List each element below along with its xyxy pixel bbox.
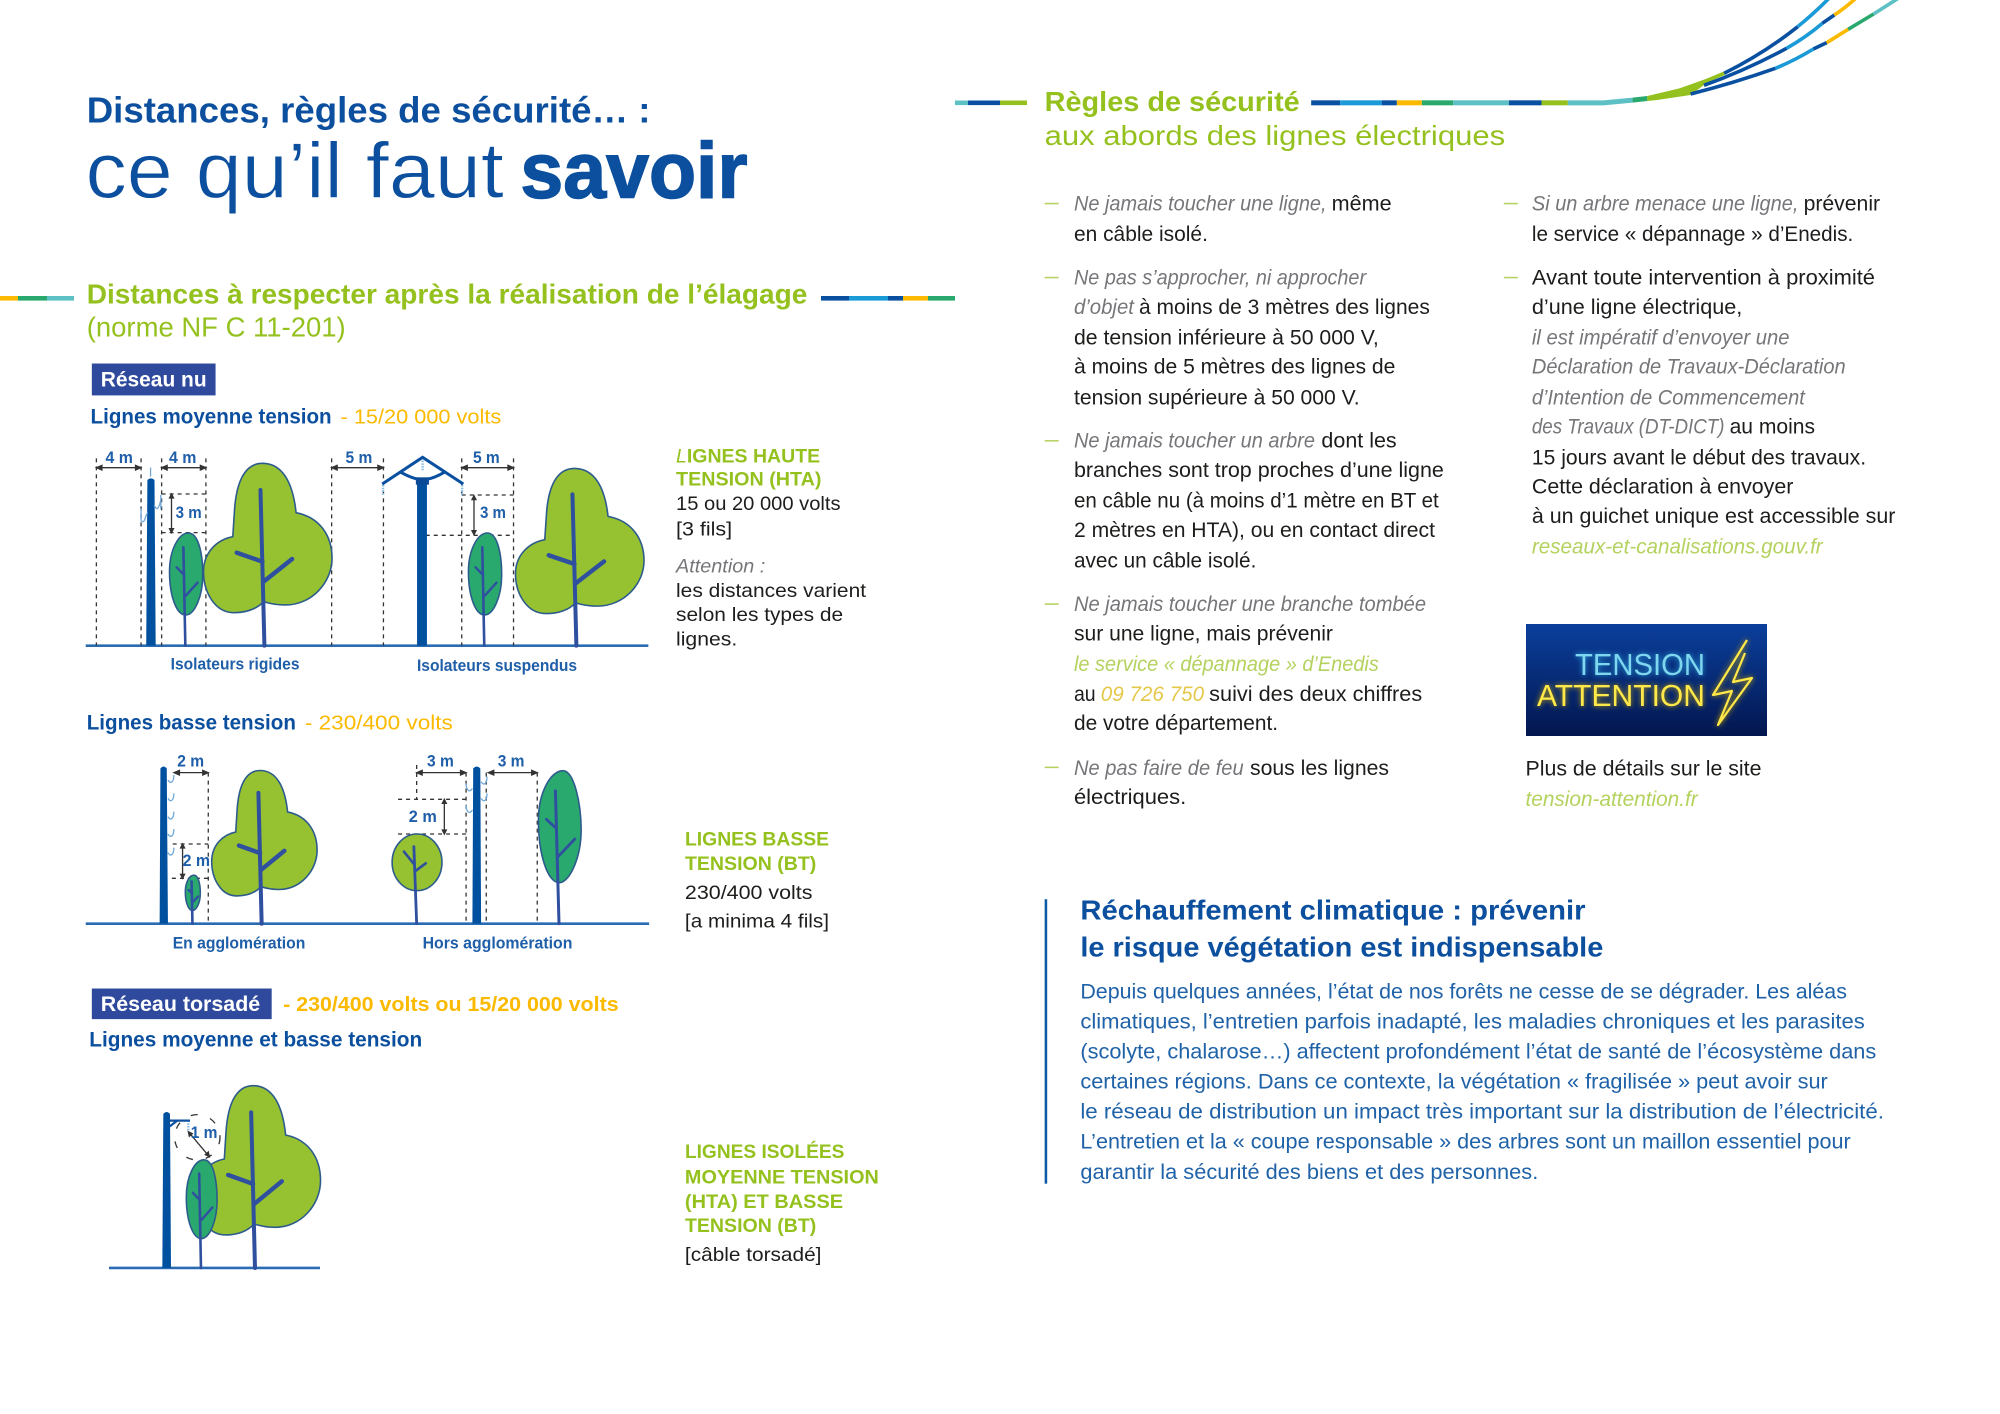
title: ce qu’il faut bbox=[85, 126, 504, 215]
diagram: réseau torsadé bbox=[109, 1086, 321, 1268]
callout body bbox=[1080, 979, 1884, 1184]
diagram dimension labels moyenne tension: 4 m bbox=[169, 448, 196, 467]
rule 4 bbox=[1045, 591, 1426, 735]
rule 3 bbox=[1045, 428, 1444, 573]
diagram dimension labels basse tension: 3 m bbox=[498, 752, 524, 771]
rule 7: à un guichet unique est accessible sur bbox=[1532, 503, 1895, 528]
title: Distances, règles de sécurité… : bbox=[87, 90, 651, 130]
text: lignes basse tension BT: [a minima 4 fils] bbox=[685, 911, 829, 932]
rule 1: en câble isolé. bbox=[1074, 221, 1208, 246]
diagram dimension labels moyenne tension: Isolateurs rigides bbox=[171, 655, 299, 674]
text: lignes basse tension BT bbox=[685, 829, 829, 932]
subheading: lignes moyenne tension: - 15/20 000 volts bbox=[341, 406, 501, 428]
text: lignes isolées bbox=[685, 1140, 879, 1266]
all text in 1568-wide layout units bbox=[85, 86, 1895, 1266]
text: lignes haute tension: lignes. bbox=[676, 629, 737, 650]
rule 3: branches sont trop proches d’une ligne bbox=[1074, 457, 1444, 482]
rule 2: à moins de 3 mètres des lignes bbox=[1139, 294, 1430, 319]
diagram dimension labels basse tension: 3 m bbox=[427, 752, 454, 771]
callout body: Depuis quelques années, l’état de nos forêts ne cesse de se dégrader. Les aléas bbox=[1080, 979, 1847, 1004]
icon: very small tree bbox=[185, 875, 200, 924]
heading: distances à respecter: Distances à respecter après la réalisation de l’élagage bbox=[87, 279, 807, 310]
subheading: lignes moyenne tension bbox=[91, 405, 501, 428]
rule 7: au moins bbox=[1730, 414, 1815, 439]
icon: dashed circle and arrow 1 m bbox=[175, 1115, 220, 1160]
callout body: le réseau de distribution un impact très important sur la distribution de l’électricité. bbox=[1080, 1099, 1884, 1124]
rule 7: d’Intention de Commencement bbox=[1532, 384, 1806, 409]
rule 3: Ne jamais toucher un arbre bbox=[1074, 428, 1315, 453]
heading: règles de sécurité bbox=[1045, 86, 1505, 151]
diagram dimension labels moyenne tension: Isolateurs suspendus bbox=[417, 656, 577, 675]
icon: arrows 4 m, 3 m, 5 m bbox=[96, 465, 514, 535]
icon: round tree bbox=[392, 834, 442, 924]
rule 2: Ne pas s’approcher, ni approcher bbox=[1074, 264, 1367, 289]
text: lignes haute tension: Attention : bbox=[675, 557, 765, 578]
text: lignes haute tension: LIGNES HAUTE bbox=[676, 445, 820, 467]
subheading: lignes moyenne tension: Lignes moyenne tension bbox=[91, 405, 332, 428]
rule 4: sur une ligne, mais prévenir bbox=[1074, 620, 1333, 645]
title bbox=[85, 90, 747, 215]
rule 3: dont les bbox=[1321, 428, 1397, 453]
image: tension attention neon logo: TENSION bbox=[1575, 647, 1705, 682]
image: tension attention neon logo bbox=[1526, 624, 1767, 736]
rule 7 bbox=[1504, 264, 1895, 559]
rule 3: en câble nu (à moins d’1 mètre en BT et bbox=[1074, 488, 1439, 513]
link: tension-attention: tension-attention.fr bbox=[1526, 786, 1698, 811]
rule 5 bbox=[1045, 755, 1389, 809]
rule 4: 09 726 750 bbox=[1101, 681, 1204, 706]
icon: arrows 2 m, 3 m bbox=[174, 770, 537, 878]
list column 1 bbox=[1045, 190, 1444, 809]
text: lignes isolées: (HTA) ET BASSE bbox=[685, 1191, 843, 1213]
icon: large tree bbox=[204, 463, 332, 646]
text: lignes haute tension: 15 ou 20 000 volts bbox=[676, 494, 841, 515]
rule 6: Si un arbre menace une ligne, bbox=[1532, 190, 1798, 215]
diagram dimension label 1 m: 1 m bbox=[191, 1123, 217, 1142]
icon: pole hors agglomération bbox=[466, 766, 487, 924]
diagram dimension labels basse tension: 2 m bbox=[183, 851, 210, 870]
rule 5: électriques. bbox=[1074, 784, 1186, 809]
link: tension-attention bbox=[1526, 756, 1761, 811]
badge: réseau torsadé bbox=[92, 989, 272, 1019]
rule 3: 2 mètres en HTA), ou en contact direct bbox=[1074, 517, 1435, 542]
callout body: L’entretien et la « coupe responsable » des arbres sont un maillon essentiel pour bbox=[1080, 1129, 1851, 1154]
icon: pole en agglomération bbox=[160, 766, 174, 924]
rule 6: prévenir bbox=[1804, 190, 1880, 215]
diagram dimension labels moyenne tension: 3 m bbox=[176, 503, 202, 522]
rule 5: sous les lignes bbox=[1250, 755, 1389, 780]
heading: distances à respecter bbox=[87, 279, 807, 343]
rule 4: de votre département. bbox=[1074, 710, 1278, 735]
subheading: lignes basse tension: - 230/400 volts bbox=[305, 713, 453, 735]
rule 7: Déclaration de Travaux-Déclaration bbox=[1532, 354, 1846, 379]
icon: small tree bbox=[170, 533, 203, 646]
badge: réseau torsadé: Réseau torsadé bbox=[101, 993, 260, 1016]
badge: réseau nu bbox=[92, 364, 216, 395]
diagram dimension labels moyenne tension bbox=[105, 448, 577, 675]
rule 6 bbox=[1504, 190, 1880, 246]
text: lignes isolées: LIGNES ISOLÉES bbox=[685, 1140, 844, 1163]
title: savoir bbox=[520, 126, 747, 215]
icon: small tree bbox=[186, 1160, 217, 1268]
callout heading: le risque végétation est indispensable bbox=[1080, 932, 1603, 963]
rule 4: le service « dépannage » d’Enedis bbox=[1074, 651, 1379, 676]
heading: règles de sécurité: aux abords des lignes électriques bbox=[1045, 120, 1505, 151]
diagram dimension labels moyenne tension: 4 m bbox=[105, 448, 133, 467]
text: lignes haute tension: selon les types de bbox=[676, 605, 843, 626]
rule 7: d’une ligne électrique, bbox=[1532, 294, 1742, 319]
rule 1 bbox=[1045, 190, 1392, 246]
text: lignes isolées: [câble torsadé] bbox=[685, 1245, 821, 1266]
text: lignes isolées: MOYENNE TENSION bbox=[685, 1167, 879, 1189]
icon: pole with suspended insulators bbox=[382, 457, 463, 646]
diagram: lignes basse tension bbox=[86, 765, 649, 924]
diagram dimension labels moyenne tension: 5 m bbox=[473, 448, 500, 467]
diagram dimension labels basse tension: 2 m bbox=[409, 807, 437, 826]
rule 4: au bbox=[1074, 681, 1096, 706]
rule 2: à moins de 5 mètres des lignes de bbox=[1074, 354, 1395, 379]
rule 5: Ne pas faire de feu bbox=[1074, 755, 1244, 780]
subheading: lignes basse tension: Lignes basse tension bbox=[87, 712, 296, 735]
rule 7: reseaux-et-canalisations.gouv.fr bbox=[1532, 534, 1823, 559]
diagram dimension labels basse tension: 2 m bbox=[177, 752, 204, 771]
rule 4: Ne jamais toucher une branche tombée bbox=[1074, 591, 1426, 616]
callout: réchauffement climatique bbox=[1045, 895, 1884, 1184]
rule 7: Cette déclaration à envoyer bbox=[1532, 474, 1793, 499]
callout heading bbox=[1080, 895, 1603, 963]
rule 4: suivi des deux chiffres bbox=[1209, 681, 1422, 706]
subheading: réseau torsadé voltage: - 230/400 volts ou 15/20 000 volts bbox=[283, 994, 619, 1016]
diagram dimension labels basse tension: Hors agglomération bbox=[423, 933, 572, 952]
callout body: garantir la sécurité des biens et des personnes. bbox=[1080, 1159, 1538, 1184]
callout body: certaines régions. Dans ce contexte, la végétation « fragilisée » peut avoir sur bbox=[1080, 1068, 1828, 1093]
callout heading: Réchauffement climatique : prévenir bbox=[1080, 895, 1586, 926]
link: tension-attention: Plus de détails sur le site bbox=[1526, 756, 1761, 781]
heading: distances à respecter: (norme NF C 11-201) bbox=[87, 312, 346, 343]
heading accent bars bbox=[0, 100, 1027, 301]
decorative curved power lines, top right bbox=[1311, 0, 1898, 105]
text: lignes haute tension: [3 fils] bbox=[676, 520, 732, 541]
icon: small tree 2 bbox=[468, 533, 502, 646]
rule 1: Ne jamais toucher une ligne, bbox=[1074, 190, 1327, 215]
rule 6: le service « dépannage » d’Enedis. bbox=[1532, 221, 1853, 246]
text: lignes basse tension BT: LIGNES BASSE bbox=[685, 829, 829, 851]
diagram dimension labels moyenne tension: 5 m bbox=[346, 448, 372, 467]
rule 3: avec un câble isolé. bbox=[1074, 548, 1256, 573]
icon: large tree bbox=[196, 1086, 321, 1268]
rule 7: des Travaux (DT-DICT) bbox=[1532, 414, 1724, 439]
text: lignes basse tension BT: TENSION (BT) bbox=[685, 853, 816, 875]
heading: règles de sécurité: Règles de sécurité bbox=[1045, 86, 1300, 117]
image: tension attention neon logo: ATTENTION bbox=[1537, 678, 1705, 713]
icon: large tree 2 bbox=[516, 468, 644, 646]
icon: tall tree bbox=[538, 771, 581, 924]
text: lignes haute tension: TENSION (HTA) bbox=[676, 468, 821, 490]
rule 2: d’objet bbox=[1074, 294, 1135, 319]
callout body: climatiques, l’entretien parfois inadapté, les maladies chroniques et les parasites bbox=[1080, 1008, 1865, 1033]
rule 7: 15 jours avant le début des travaux. bbox=[1532, 444, 1866, 469]
subheading: lignes moyenne et basse tension: Lignes moyenne et basse tension bbox=[89, 1029, 422, 1052]
diagram dimension labels basse tension: En agglomération bbox=[173, 933, 305, 952]
rule 7: Avant toute intervention à proximité bbox=[1532, 264, 1875, 289]
diagram: lignes moyenne tension, isolateurs rigides et suspendus bbox=[86, 457, 648, 646]
text: lignes haute tension bbox=[675, 445, 867, 650]
rule 2 bbox=[1045, 264, 1430, 409]
rule 1: même bbox=[1332, 190, 1392, 215]
text: lignes basse tension BT: 230/400 volts bbox=[685, 883, 812, 904]
callout body: (scolyte, chalarose…) affectent profondément l’état de santé de l’écosystème dans bbox=[1080, 1039, 1876, 1064]
text: lignes haute tension: les distances varient bbox=[676, 581, 867, 602]
icon: pole with rigid insulators bbox=[141, 468, 161, 646]
list column 2 bbox=[1504, 190, 1895, 559]
text: lignes isolées: TENSION (BT) bbox=[685, 1215, 816, 1237]
rule 2: tension supérieure à 50 000 V. bbox=[1074, 384, 1360, 409]
badge: réseau nu: Réseau nu bbox=[101, 368, 207, 391]
diagram dimension labels moyenne tension: 3 m bbox=[480, 503, 506, 522]
rule 2: de tension inférieure à 50 000 V, bbox=[1074, 324, 1379, 349]
rule 7: il est impératif d’envoyer une bbox=[1532, 324, 1790, 349]
icon: large tree bbox=[212, 771, 317, 924]
subheading: lignes basse tension bbox=[87, 712, 453, 735]
diagram dimension labels basse tension bbox=[173, 752, 572, 952]
icon: pole with arm bbox=[162, 1112, 190, 1268]
